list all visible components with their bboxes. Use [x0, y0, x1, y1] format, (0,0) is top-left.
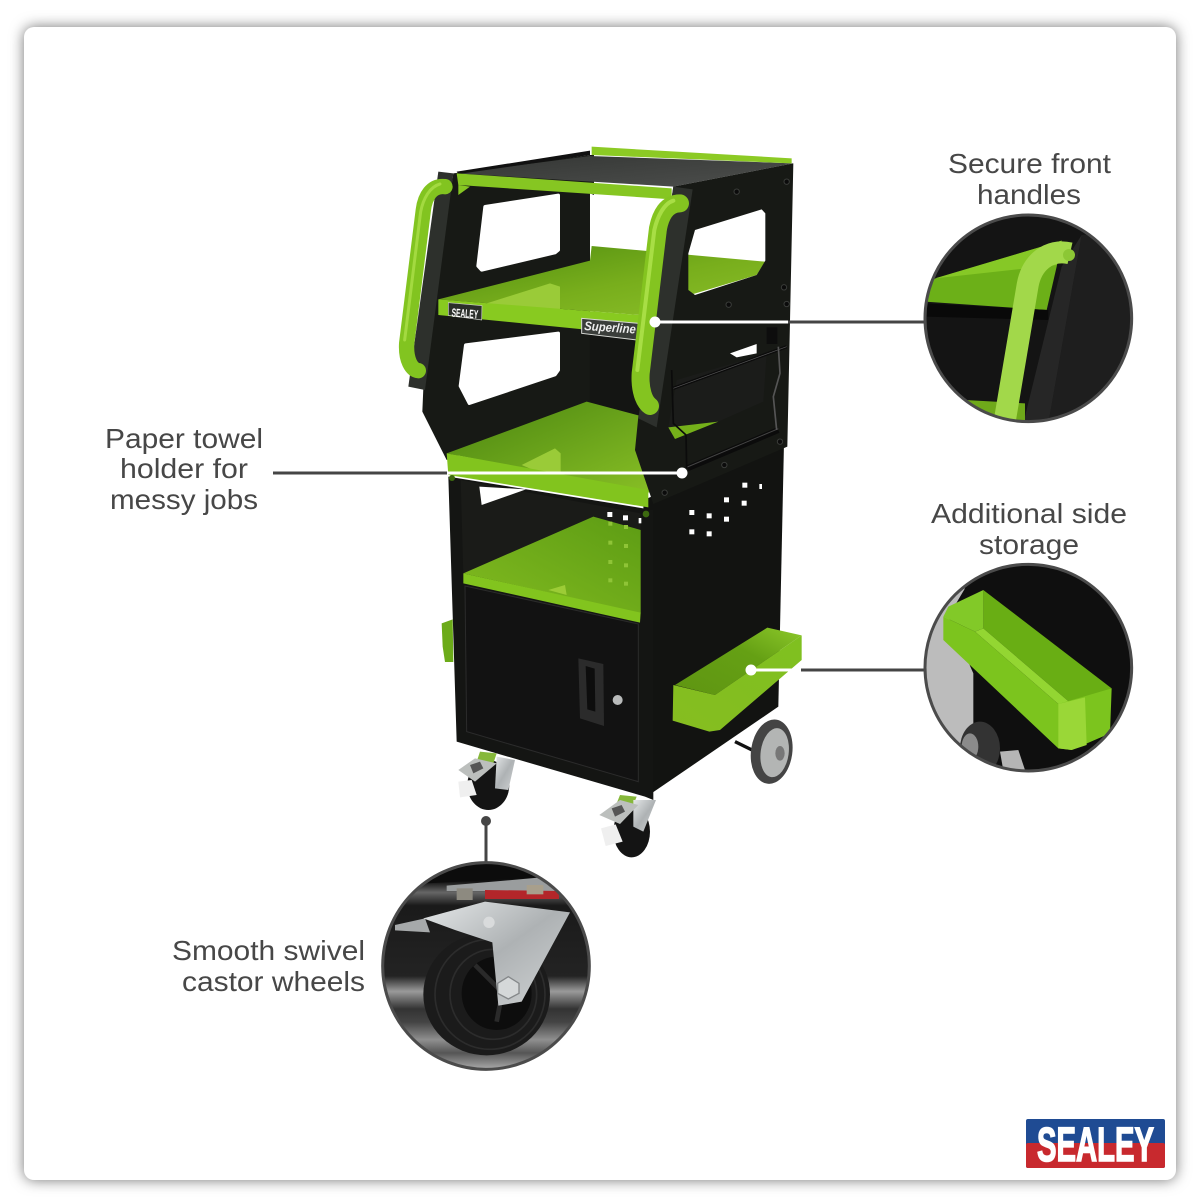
leader: front handles	[650, 316, 928, 328]
top plate	[457, 156, 793, 187]
leader: side storage	[746, 664, 928, 676]
leader: castor wheels	[481, 816, 491, 866]
rear lower panel	[590, 327, 643, 418]
side storage bin	[673, 628, 802, 732]
callout circle: front handle detail	[924, 214, 1134, 424]
paper towel holder	[668, 327, 787, 468]
front right castor	[599, 795, 656, 857]
right green handle	[637, 201, 680, 406]
right handle plate	[638, 187, 693, 427]
label: paper towel holder: Paper towel	[105, 423, 263, 454]
callout circle: side storage detail	[924, 562, 1134, 772]
badge: Superline Pro: Superline	[584, 319, 636, 337]
white gap behind frame	[590, 195, 767, 263]
badge: Sealey	[448, 303, 482, 322]
frame bolts	[662, 179, 789, 495]
door lock	[613, 695, 623, 705]
product: upper trolley frame	[405, 147, 793, 517]
tyre and hub	[423, 933, 550, 1055]
left side bin	[442, 619, 453, 662]
door handle	[578, 658, 604, 726]
infographic canvas	[107, 146, 1165, 1168]
top front lip green	[457, 173, 672, 199]
cabinet door	[465, 586, 638, 782]
left green handle	[405, 184, 445, 371]
middle shelf	[438, 246, 765, 335]
label: paper towel holder: holder for	[120, 453, 248, 484]
label: smooth swivel castor wheels: Smooth swivel	[172, 935, 365, 966]
left wall	[422, 155, 590, 460]
label: additional side storage: storage	[979, 529, 1079, 560]
left wall upper window	[478, 195, 558, 270]
front left castor	[458, 752, 515, 810]
label: smooth swivel castor wheels: castor wheels	[182, 966, 365, 997]
cabinet shelf	[463, 517, 641, 623]
callout circle: castor wheel detail	[381, 861, 591, 1071]
rear wheel	[735, 717, 797, 787]
rear panel	[590, 155, 594, 195]
green front bolt	[643, 511, 649, 517]
top back edge black	[457, 151, 590, 174]
label: secure front handles: Secure front	[948, 148, 1111, 179]
label: secure front handles: handles	[977, 179, 1081, 210]
top back lip green	[592, 147, 792, 163]
side pegboard holes	[689, 483, 762, 536]
cabinet side	[643, 443, 784, 797]
lower shelf	[447, 402, 653, 507]
cabinet front frame	[448, 477, 653, 800]
label: additional side storage: Additional side	[931, 498, 1127, 529]
label: paper towel holder: messy jobs	[110, 484, 258, 515]
left handle plate	[408, 172, 453, 390]
product: lower cabinet and wheels	[442, 443, 802, 857]
open interior with window	[461, 480, 641, 613]
badge: Sealey: SEALEY	[451, 306, 479, 322]
left wall lower window	[460, 333, 558, 403]
leader: paper towel holder	[273, 468, 688, 478]
right wall	[635, 163, 793, 504]
